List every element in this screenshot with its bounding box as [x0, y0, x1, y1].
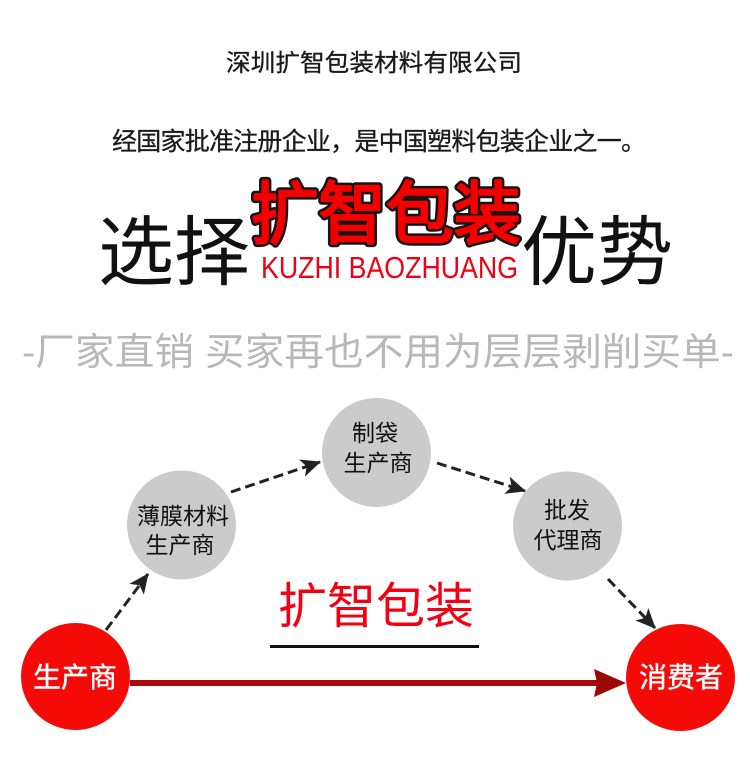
slogan: -厂家直销 买家再也不用为层层剥削买单-: [22, 332, 734, 374]
node: wholesaler: 批发: [544, 497, 590, 523]
brand name outlined: 扩智包装: [251, 177, 521, 253]
node: film supplier: 生产商: [146, 532, 214, 558]
headline left: 选择: 选择: [98, 211, 250, 296]
brand name outlined: 扩智包装: [251, 177, 521, 253]
headline right: 优势: 优势: [521, 211, 673, 296]
node: consumer: [626, 624, 735, 731]
subtitle: 经国家批准注册企业，是中国塑料包装企业之一。: [112, 128, 646, 156]
node: consumer: 消费者: [639, 662, 723, 693]
node: producer: 生产商: [33, 662, 117, 693]
headline: [98, 177, 673, 296]
arrow: wholesaler to consumer: [608, 579, 655, 628]
center brand label: 扩智包装: [278, 580, 474, 634]
center underline: [270, 645, 479, 648]
arrow: direct producer to consumer: [130, 669, 626, 697]
arrow: bag to wholesaler: [437, 463, 525, 491]
node: bag maker: 生产商: [344, 450, 412, 476]
arrow: producer to film: [106, 574, 148, 630]
node: wholesaler: 代理商: [534, 527, 602, 553]
node: film supplier: [127, 470, 236, 580]
company name: 深圳扩智包装材料有限公司: [226, 50, 522, 77]
node: bag maker: 制袋: [352, 420, 398, 446]
arrow: film to bag: [231, 462, 320, 492]
brand latin name: KUZHI BAOZHUANG: [261, 250, 518, 285]
node: wholesaler: [513, 472, 622, 580]
flow diagram: [21, 398, 735, 731]
node: bag maker: [322, 398, 431, 507]
node: producer: [21, 623, 130, 730]
node: film supplier: 薄膜材料: [137, 503, 229, 529]
